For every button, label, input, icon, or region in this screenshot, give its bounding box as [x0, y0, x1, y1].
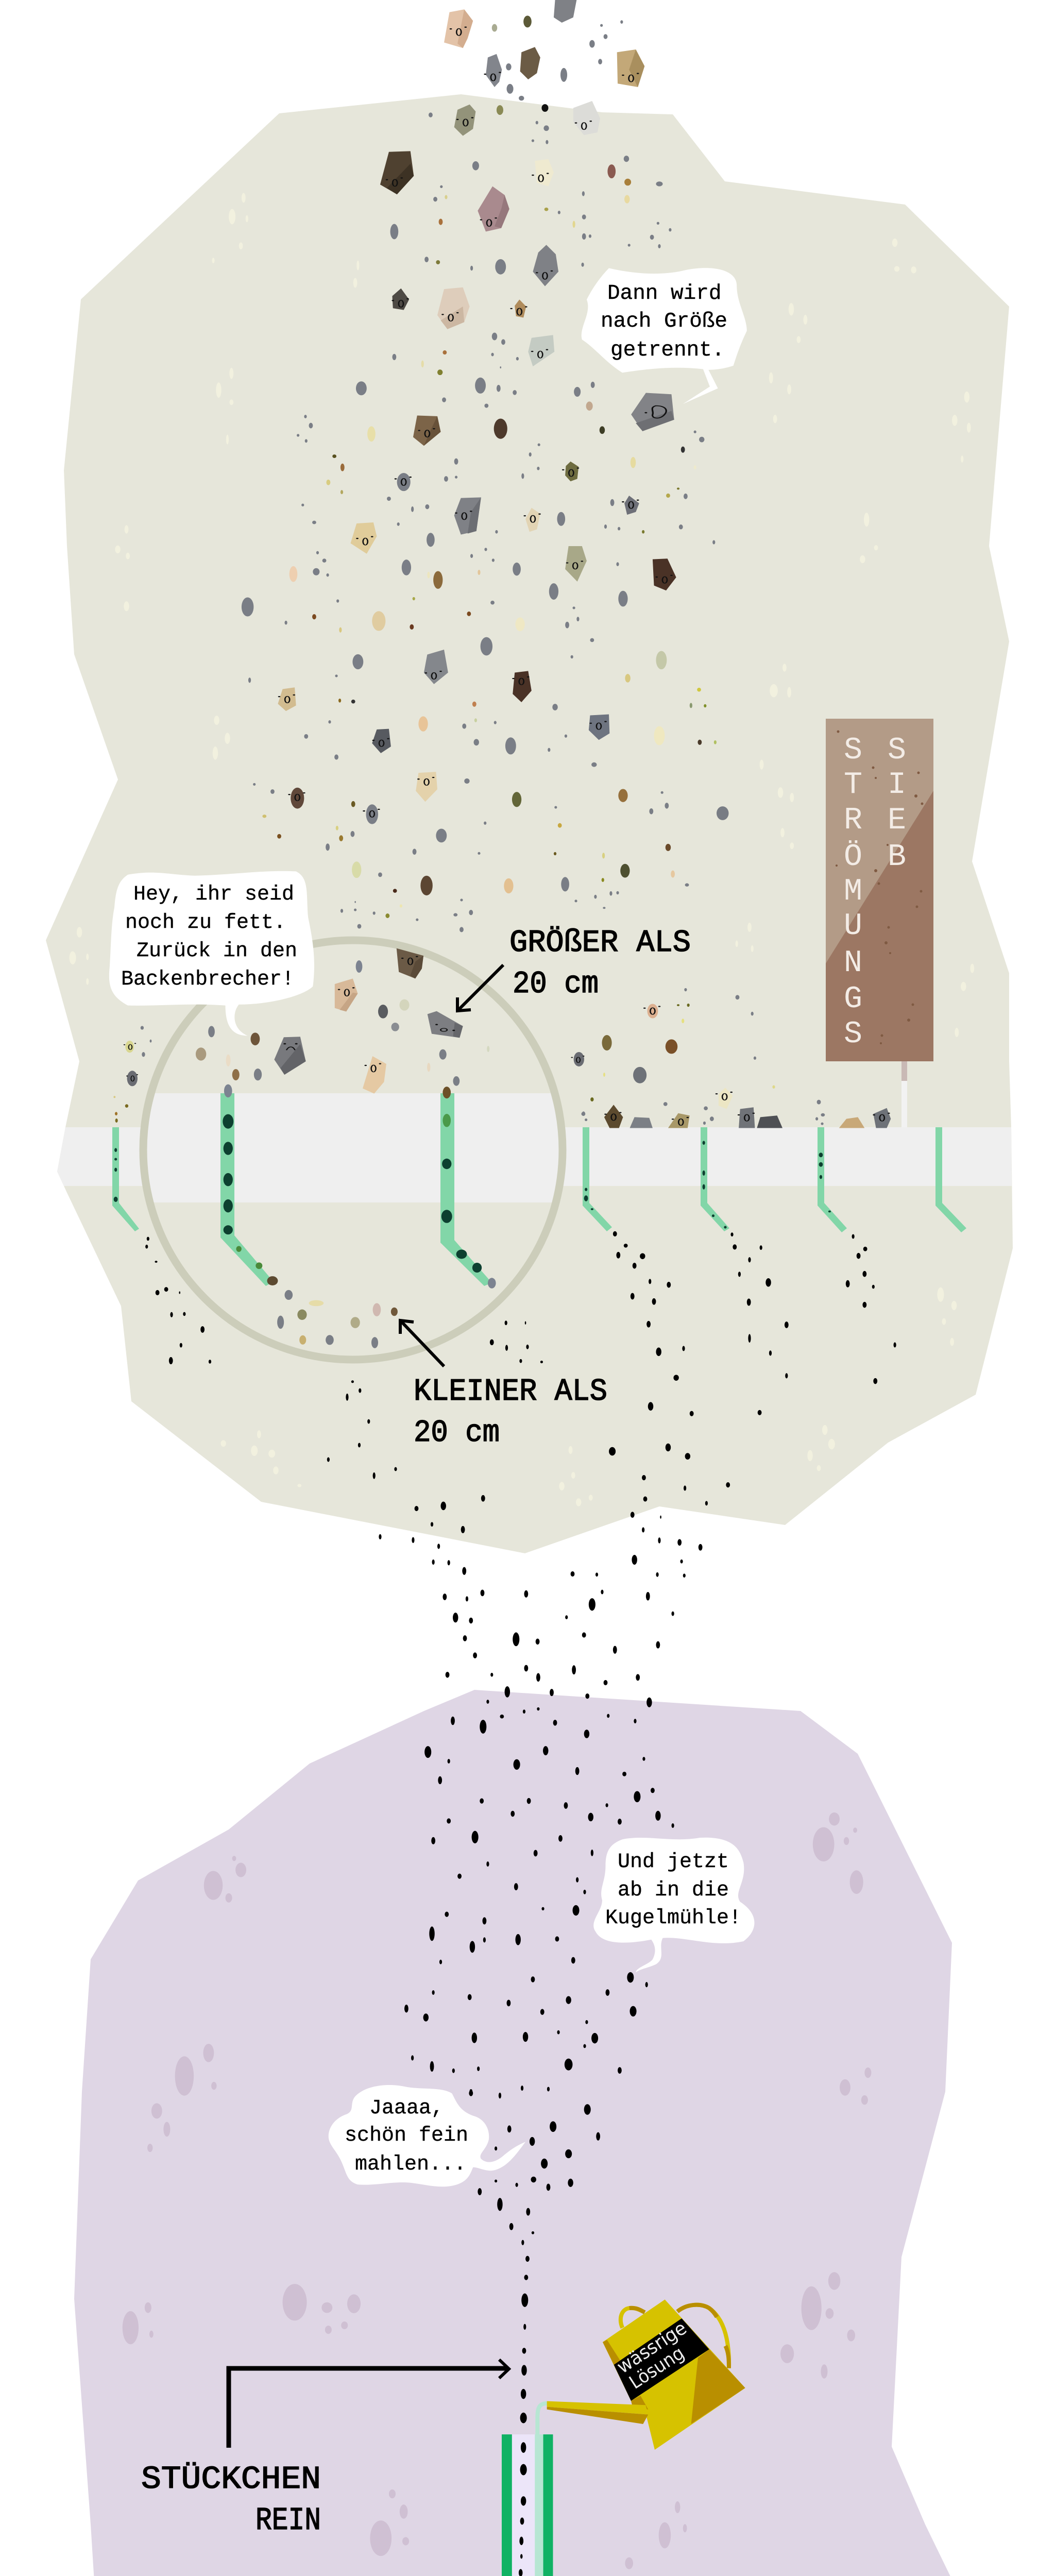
panel: ball mill stage background: [74, 1690, 1009, 2576]
particles passing through the sieve bars: [114, 1084, 831, 1289]
label: Stückchen rein: STÜCKCHEN: [141, 2461, 321, 2498]
label: Stückchen rein: REIN: [256, 2502, 321, 2539]
panel: separation stage background: [46, 94, 1013, 1553]
sign: Strömungssieb: S: [888, 733, 906, 768]
watering can with aqueous solution: [537, 2299, 745, 2450]
speech bubble: Und jetzt ab in die Kugelmühle: ab in die: [618, 1879, 729, 1902]
sign: Strömungssieb: T: [844, 768, 862, 803]
label on watering can: wässrige: [614, 2317, 690, 2378]
sign: Strömungssieb: B: [888, 840, 906, 875]
arrow to small fragments: [400, 1320, 444, 1366]
falling black pieces into the mill: [404, 1590, 674, 2092]
sign: Strömungssieb: [826, 719, 933, 1127]
speech bubble: Hey, ihr seid noch zu fett: Backenbrecher!: [121, 968, 294, 991]
sign: Strömungssieb: Ö: [844, 840, 862, 875]
arrow from label to tube: [229, 2360, 509, 2448]
speech bubble: Und jetzt ab in die Kugelmühle: Und jetzt: [618, 1851, 729, 1874]
green sieve bars: [112, 1093, 966, 1286]
speech bubble: Und jetzt ab in die Kugelmühle: Kugelmühle!: [605, 1907, 741, 1930]
speech bubble: Hey, ihr seid noch zu fett: noch zu fett.: [125, 911, 286, 935]
label: kleiner als 20 cm: 20 cm: [414, 1416, 500, 1451]
speech bubble: Und jetzt ab in die Kugelmühle: [593, 1838, 754, 1973]
sign: Strömungssieb: G: [844, 982, 862, 1017]
sign: Strömungssieb: E: [888, 803, 906, 838]
falling black pieces below the sieve: [145, 1231, 896, 1578]
speech bubble: Dann wird nach Größe getrennt: getrennt.: [610, 338, 724, 362]
speech bubble: Jaaaa, schön fein mahlen: schön fein: [345, 2124, 468, 2147]
speech bubble: Jaaaa, schön fein mahlen: mahlen...: [355, 2153, 466, 2176]
falling rocks: middle section: [242, 546, 756, 1060]
pale blotches on separation panel: [70, 193, 974, 1506]
rocks stopped at the sieve and small fragments in the circle: [277, 1067, 891, 1348]
flow band across the sieve: [57, 1127, 1012, 1186]
sign: Strömungssieb: S: [844, 733, 862, 768]
sign: Strömungssieb: N: [844, 946, 862, 981]
oversized rocks inside the magnifying circle: [113, 948, 612, 1123]
last pieces entering the vessel: [518, 2537, 523, 2576]
label: größer als 20 cm: 20 cm: [513, 967, 599, 1002]
label: größer als 20 cm: [509, 926, 691, 1002]
magnifying circle around the sieve: [139, 940, 567, 1360]
falling rocks: upper section: [297, 0, 715, 554]
speech bubble: Dann wird nach Größe getrennt: Dann wird: [607, 282, 721, 306]
sign: Strömungssieb: S: [844, 1017, 862, 1052]
label: kleiner als 20 cm: KLEINER ALS: [414, 1375, 607, 1410]
speech bubble: Dann wird nach Größe getrennt: [582, 268, 747, 404]
speech bubble: Dann wird nach Größe getrennt: nach Größe: [601, 310, 727, 333]
speech bubble: Jaaaa, schön fein mahlen: Jaaaa,: [369, 2097, 444, 2120]
label: Stückchen rein: [141, 2461, 321, 2539]
label on watering can: Lösung: [626, 2343, 688, 2394]
speech bubble: Hey, ihr seid noch zu fett: Zurück in den: [137, 940, 297, 963]
speech bubble: Jaaaa, schön fein mahlen: [329, 2085, 525, 2187]
darker blotches on mill panel: [123, 1812, 881, 2576]
ball mill vessel: [317, 2434, 737, 2576]
sign: Strömungssieb: M: [844, 874, 862, 909]
speech bubble: Hey, ihr seid noch zu fett: [109, 871, 314, 1036]
arrow to large rock: [457, 965, 503, 1011]
pieces dropping through the tube: [469, 2090, 600, 2545]
label: kleiner als 20 cm: [414, 1375, 607, 1451]
sign: Strömungssieb: I: [888, 768, 906, 803]
sign: Strömungssieb: U: [844, 909, 862, 944]
sign: Strömungssieb: R: [844, 803, 862, 838]
speech bubble: Hey, ihr seid noch zu fett: Hey, ihr seid: [133, 883, 294, 906]
label: größer als 20 cm: GRÖßER ALS: [509, 926, 691, 961]
